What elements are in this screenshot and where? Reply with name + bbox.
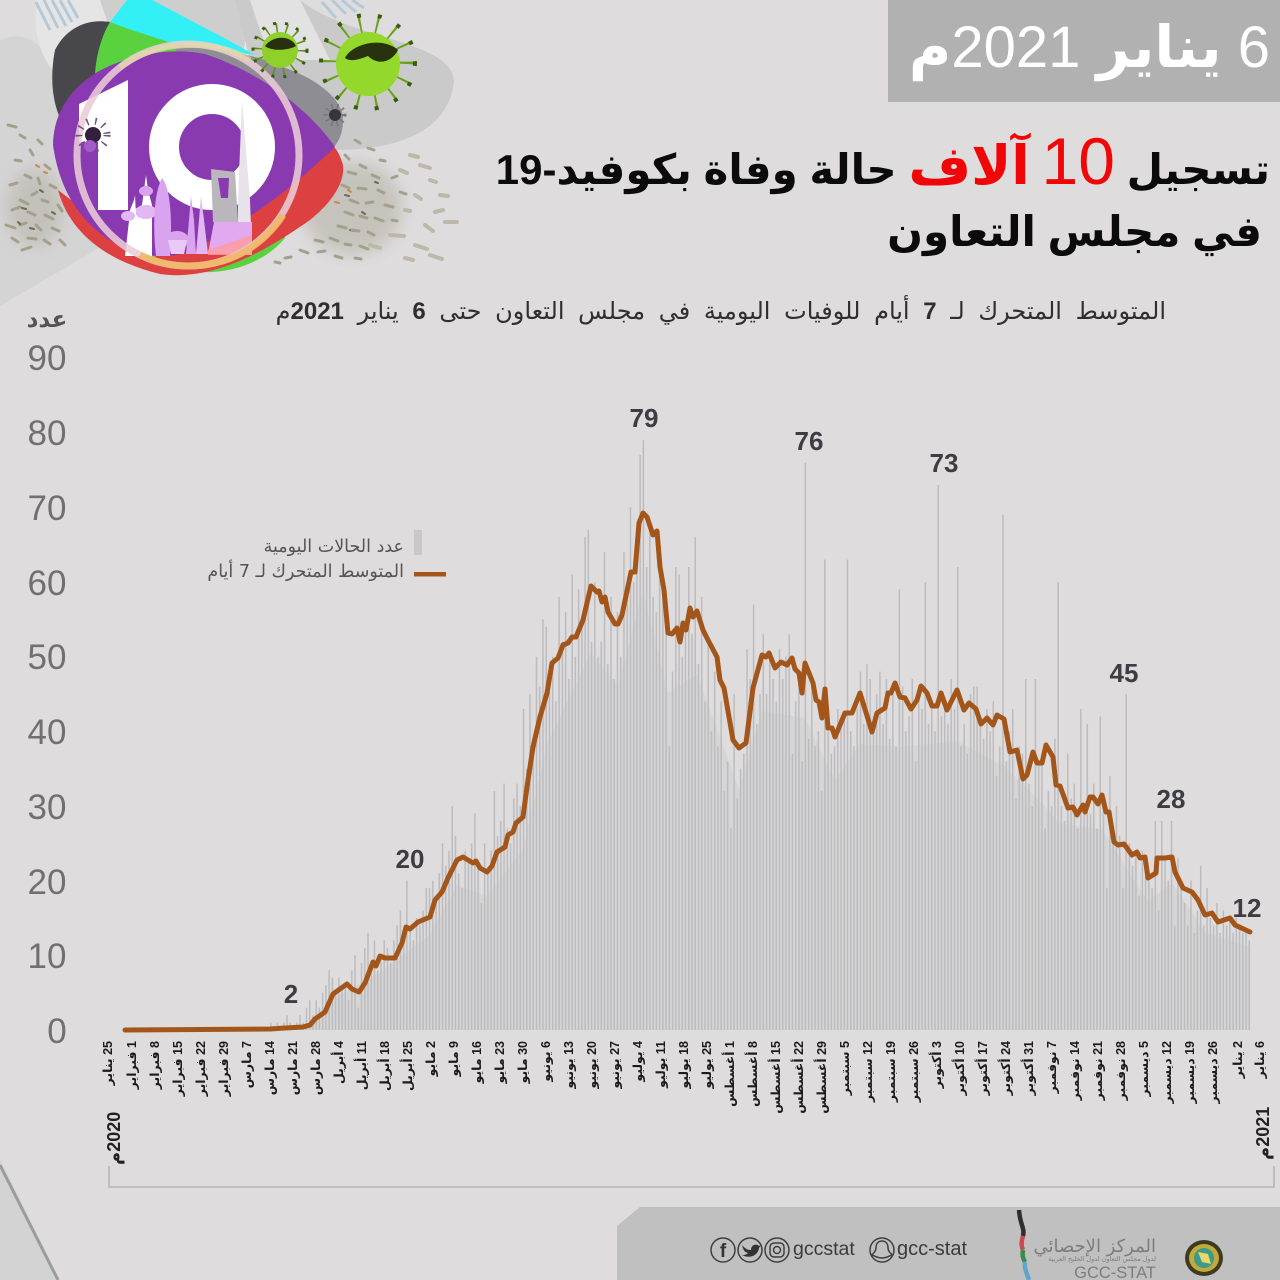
y axis labels: 70	[28, 489, 66, 528]
x axis date labels: 2 مايو	[424, 1041, 438, 1077]
legend: المتوسط المتحرك لـ 7 أيام	[207, 559, 404, 582]
y axis labels: 90	[28, 339, 66, 378]
y axis labels: 30	[28, 788, 66, 827]
chart subtitle: المتوسط المتحرك لـ 7 أيام للوفيات اليومية في مجلس التعاون حتى 6 يناير 2021م	[276, 298, 1166, 325]
x axis date labels: 26 سبتمبر	[907, 1041, 921, 1103]
title line 1: تسجيل 10 آلاف حالة وفاة بكوفيد-19	[496, 124, 1270, 198]
date range bracket	[109, 1166, 1274, 1187]
x axis date labels: 21 نوفمبر	[1091, 1041, 1105, 1101]
x axis date labels	[101, 1041, 1267, 1114]
x axis date labels: 12 ديسمبر	[1160, 1041, 1174, 1104]
data value labels: 79	[630, 403, 658, 433]
icon: twitter	[738, 1238, 762, 1262]
x axis date labels: 14 مارس	[263, 1041, 277, 1095]
debris scatter	[6, 125, 457, 263]
x axis date labels: 31 أكتوبر	[1020, 1041, 1036, 1096]
x axis date labels: 7 نوفمبر	[1045, 1041, 1059, 1094]
x axis date labels: 15 أغسطس	[767, 1041, 783, 1114]
logo purple shape	[53, 51, 335, 256]
numeral 1	[79, 80, 128, 210]
y axis labels: 40	[28, 713, 66, 752]
logo green blob	[93, 22, 285, 272]
y axis labels: 80	[28, 414, 66, 453]
legend	[207, 530, 446, 582]
x axis date labels: 25 أبريل	[399, 1041, 415, 1091]
x axis date labels: 10 أكتوبر	[951, 1041, 967, 1096]
logo cyan wedge	[110, 0, 255, 55]
x axis date labels: 2 يناير	[1231, 1041, 1245, 1079]
x axis date labels: 8 أغسطس	[744, 1041, 760, 1107]
logo text: statistical centre: لدول مجلس التعاون لدول الخليج العربية	[1048, 1255, 1156, 1263]
x axis date labels: 25 يوليو	[700, 1041, 714, 1090]
gulf skyline	[121, 100, 252, 256]
x axis date labels: 7 مارس	[240, 1041, 254, 1088]
x axis date labels: 27 يونيو	[608, 1041, 622, 1090]
x axis date labels: 5 سبتمبر	[838, 1041, 852, 1096]
x axis date labels: 30 مايو	[516, 1041, 530, 1084]
x axis date labels: 14 نوفمبر	[1068, 1041, 1082, 1101]
x axis date labels: 22 أغسطس	[790, 1041, 806, 1114]
logo dark wedge	[52, 21, 110, 118]
icon: instagram	[765, 1238, 789, 1262]
icon: facebook	[711, 1238, 735, 1262]
virus: large green	[321, 15, 415, 109]
x axis date labels: 11 يوليو	[654, 1041, 668, 1089]
social handle: gccstat: gccstat	[793, 1238, 855, 1260]
icon: snapchat	[870, 1238, 894, 1262]
year label 2021: 2021م	[1253, 1107, 1273, 1160]
logo text: statistical centre: المركز الإحصائي	[1033, 1236, 1156, 1257]
social handle: gcc-stat: gcc-stat	[897, 1238, 967, 1260]
x axis date labels: 28 مارس	[309, 1041, 323, 1095]
logo: 10 emblem with skyline	[52, 0, 415, 275]
virus: small purple	[79, 121, 107, 152]
y axis labels: 60	[28, 564, 66, 603]
data value labels: 28	[1157, 784, 1185, 814]
logo ring	[77, 44, 299, 266]
y axis labels: 10	[28, 937, 66, 976]
x axis date labels: 24 أكتوبر	[997, 1041, 1013, 1096]
x axis date labels: 22 فبراير	[194, 1041, 208, 1097]
data value labels: 12	[1233, 893, 1261, 923]
x axis date labels: 16 مايو	[470, 1041, 484, 1084]
y axis labels: 0	[47, 1012, 67, 1051]
x axis date labels: 9 مايو	[447, 1041, 461, 1077]
x axis date labels: 29 أغسطس	[813, 1041, 829, 1114]
logo grey wedge	[175, 44, 343, 147]
data value labels: 76	[795, 426, 823, 456]
social icons	[711, 1238, 894, 1262]
x axis date labels: 26 ديسمبر	[1206, 1041, 1220, 1104]
x axis date labels: 8 فبراير	[148, 1041, 162, 1090]
x axis date labels: 19 ديسمبر	[1183, 1041, 1197, 1104]
y axis labels	[28, 339, 67, 1051]
data value labels: 45	[1110, 658, 1138, 688]
moving average line	[125, 513, 1250, 1030]
x axis date labels: 4 أبريل	[330, 1041, 346, 1084]
background shapes	[0, 0, 454, 1280]
x axis date labels: 18 أبريل	[376, 1041, 392, 1091]
x axis date labels: 5 ديسمبر	[1137, 1041, 1151, 1098]
x axis date labels: 29 فبراير	[217, 1041, 231, 1097]
daily cases bars	[271, 440, 1249, 1030]
data value labels: 2	[284, 979, 298, 1009]
x axis date labels: 1 فبراير	[125, 1041, 139, 1090]
icon: gcc-stat ribbon	[1019, 1210, 1029, 1280]
x axis date labels: 4 يوليو	[631, 1041, 645, 1083]
x axis date labels: 6 يونيو	[539, 1041, 553, 1083]
virus: small grey	[326, 106, 344, 124]
logo text: statistical centre	[1033, 1236, 1156, 1280]
icon: facebook: f	[720, 1241, 727, 1262]
x axis date labels: 19 سبتمبر	[884, 1041, 898, 1103]
x axis date labels: 6 يناير	[1253, 1041, 1267, 1079]
virus: medium green	[253, 23, 307, 77]
y axis labels: 20	[28, 863, 66, 902]
x axis date labels: 3 أكتوبر	[928, 1041, 944, 1089]
footer band	[617, 1207, 1280, 1280]
data value labels: 73	[930, 448, 958, 478]
title line 2: في مجلس التعاون	[887, 208, 1262, 255]
year label 2020: 2020م	[104, 1112, 124, 1165]
numeral 0	[164, 99, 260, 195]
date heading: 6 يناير 2021م	[909, 15, 1270, 80]
x axis date labels: 25 يناير	[101, 1041, 115, 1086]
date header panel	[888, 0, 1280, 102]
x axis date labels: 20 يونيو	[585, 1041, 599, 1090]
x axis date labels: 28 نوفمبر	[1114, 1041, 1128, 1101]
data value labels	[284, 403, 1261, 1009]
logo red swoosh	[58, 147, 343, 275]
bars density wash	[300, 591, 1250, 1030]
data value labels: 20	[396, 844, 424, 874]
legend: عدد الحالات اليومية	[264, 537, 404, 557]
y axis labels: 50	[28, 638, 66, 677]
y axis unit: عدد	[27, 307, 67, 333]
x axis date labels: 23 مايو	[493, 1041, 507, 1084]
x axis date labels: 18 يوليو	[677, 1041, 691, 1090]
icon: gcc emblem	[1185, 1240, 1223, 1276]
x axis date labels: 17 أكتوبر	[974, 1041, 990, 1096]
x axis date labels: 13 يونيو	[562, 1041, 576, 1090]
x axis date labels: 21 مارس	[286, 1041, 300, 1095]
x axis date labels: 15 فبراير	[171, 1041, 185, 1097]
x axis date labels: 1 أغسطس	[721, 1041, 737, 1107]
x axis date labels: 12 سبتمبر	[861, 1041, 875, 1103]
x axis date labels: 11 أبريل	[353, 1041, 369, 1090]
